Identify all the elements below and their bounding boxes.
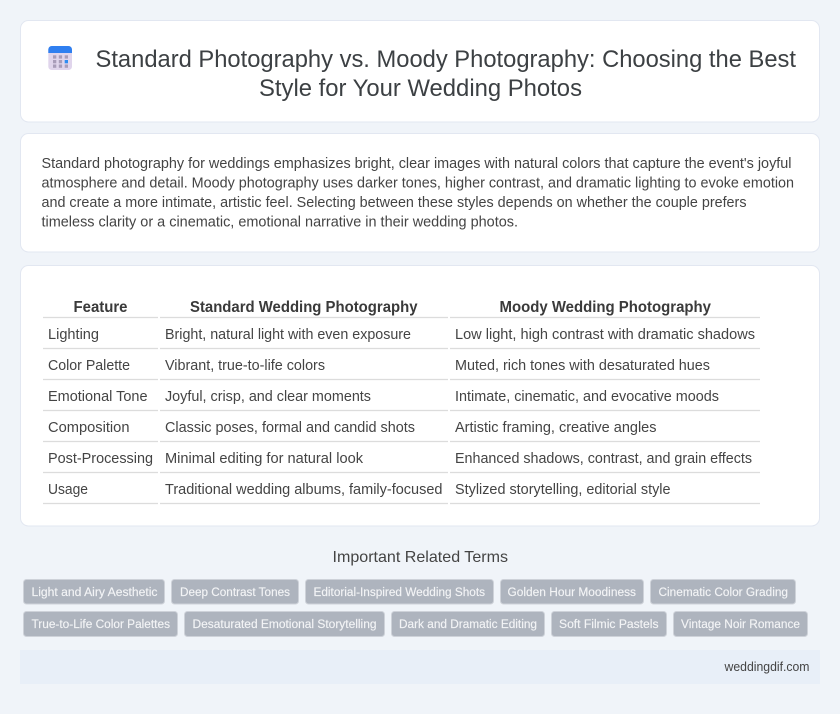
table row: Composition xyxy=(48,420,656,436)
table header row: Moody Wedding Photography xyxy=(500,299,711,316)
panel: intro paragraph card xyxy=(20,134,820,252)
tag: Golden Hour Moodiness xyxy=(508,585,636,599)
table row: Post-Processing: Enhanced shadows, contrast, and grain effects xyxy=(455,451,752,467)
text block: intro paragraph: Standard photography for weddings emphasizes bright, clear images with natural colors that capture the event's joyful xyxy=(42,156,791,172)
table header row: Standard Wedding Photography xyxy=(190,299,418,316)
table row: Emotional Tone: Intimate, cinematic, and evocative moods xyxy=(455,389,719,405)
tag: Dark and Dramatic Editing xyxy=(399,617,537,631)
tag: True-to-Life Color Palettes xyxy=(32,617,170,631)
title: Standard Photography vs. Moody Photography: Choosing the Best xyxy=(96,46,796,73)
table row: Post-Processing: Post-Processing xyxy=(48,451,153,467)
tags: related terms xyxy=(24,580,808,636)
tag xyxy=(24,580,164,604)
text block: intro paragraph: timeless clarity or a cinematic, emotional narrative in their wedding photos. xyxy=(42,214,518,230)
table row: Color Palette: Vibrant, true-to-life colors xyxy=(165,358,325,374)
table row: Usage: Stylized storytelling, editorial style xyxy=(455,482,670,498)
table row: Composition: Classic poses, formal and candid shots xyxy=(165,420,415,436)
tag xyxy=(392,612,544,636)
table row: Usage xyxy=(48,482,670,498)
footer bar xyxy=(20,650,820,684)
table row: Lighting xyxy=(48,327,755,343)
tag xyxy=(172,580,298,604)
table header row xyxy=(74,299,711,316)
tag: Soft Filmic Pastels xyxy=(559,617,658,631)
tag xyxy=(500,580,644,604)
table row: Lighting: Low light, high contrast with dramatic shadows xyxy=(455,327,755,343)
table row: Color Palette: Muted, rich tones with desaturated hues xyxy=(455,358,710,374)
table row: Emotional Tone: Joyful, crisp, and clear moments xyxy=(165,389,371,405)
footer source text: weddingdif.com xyxy=(724,659,810,674)
tag: Editorial-Inspired Wedding Shots xyxy=(314,585,485,599)
table row: Lighting: Bright, natural light with even exposure xyxy=(165,327,411,343)
table row: Usage: Traditional wedding albums, family-focused xyxy=(165,482,442,498)
tag xyxy=(650,580,796,604)
tag xyxy=(306,580,494,604)
panel: title card xyxy=(20,20,820,122)
table row: Lighting: Lighting xyxy=(48,327,99,343)
table header row: Feature xyxy=(74,299,128,316)
tag xyxy=(674,612,808,636)
table row: Emotional Tone xyxy=(48,389,719,405)
table row: Color Palette xyxy=(48,358,710,374)
tag: Vintage Noir Romance xyxy=(681,617,800,631)
text block: intro paragraph xyxy=(42,156,794,230)
panel: comparison table card xyxy=(20,266,820,526)
heading: important related terms: Important Related Terms xyxy=(332,549,508,566)
title: Style for Your Wedding Photos xyxy=(259,75,582,102)
icon: calendar xyxy=(48,46,72,70)
text block: intro paragraph: atmosphere and detail. Moody photography uses darker tones, higher contrast, and dramatic lighting to evoke emotion xyxy=(42,176,794,192)
tag: Desaturated Emotional Storytelling xyxy=(192,617,376,631)
tag xyxy=(184,612,384,636)
title xyxy=(96,46,796,102)
tag: Deep Contrast Tones xyxy=(180,585,290,599)
table row: Usage: Usage xyxy=(48,482,88,498)
tag xyxy=(24,612,178,636)
tag: Cinematic Color Grading xyxy=(658,585,788,599)
tag xyxy=(552,612,666,636)
table row: Color Palette: Color Palette xyxy=(48,358,130,374)
table row: Emotional Tone: Emotional Tone xyxy=(48,389,148,405)
table row: Composition: Composition xyxy=(48,420,130,436)
tag: Light and Airy Aesthetic xyxy=(32,585,158,599)
table row: Post-Processing xyxy=(48,451,752,467)
text block: intro paragraph: and create a more intimate, artistic feel. Selecting between these styles depends on whether the couple prefers xyxy=(42,195,746,211)
table row: Post-Processing: Minimal editing for natural look xyxy=(165,451,364,467)
table row: Composition: Artistic framing, creative angles xyxy=(455,420,656,436)
